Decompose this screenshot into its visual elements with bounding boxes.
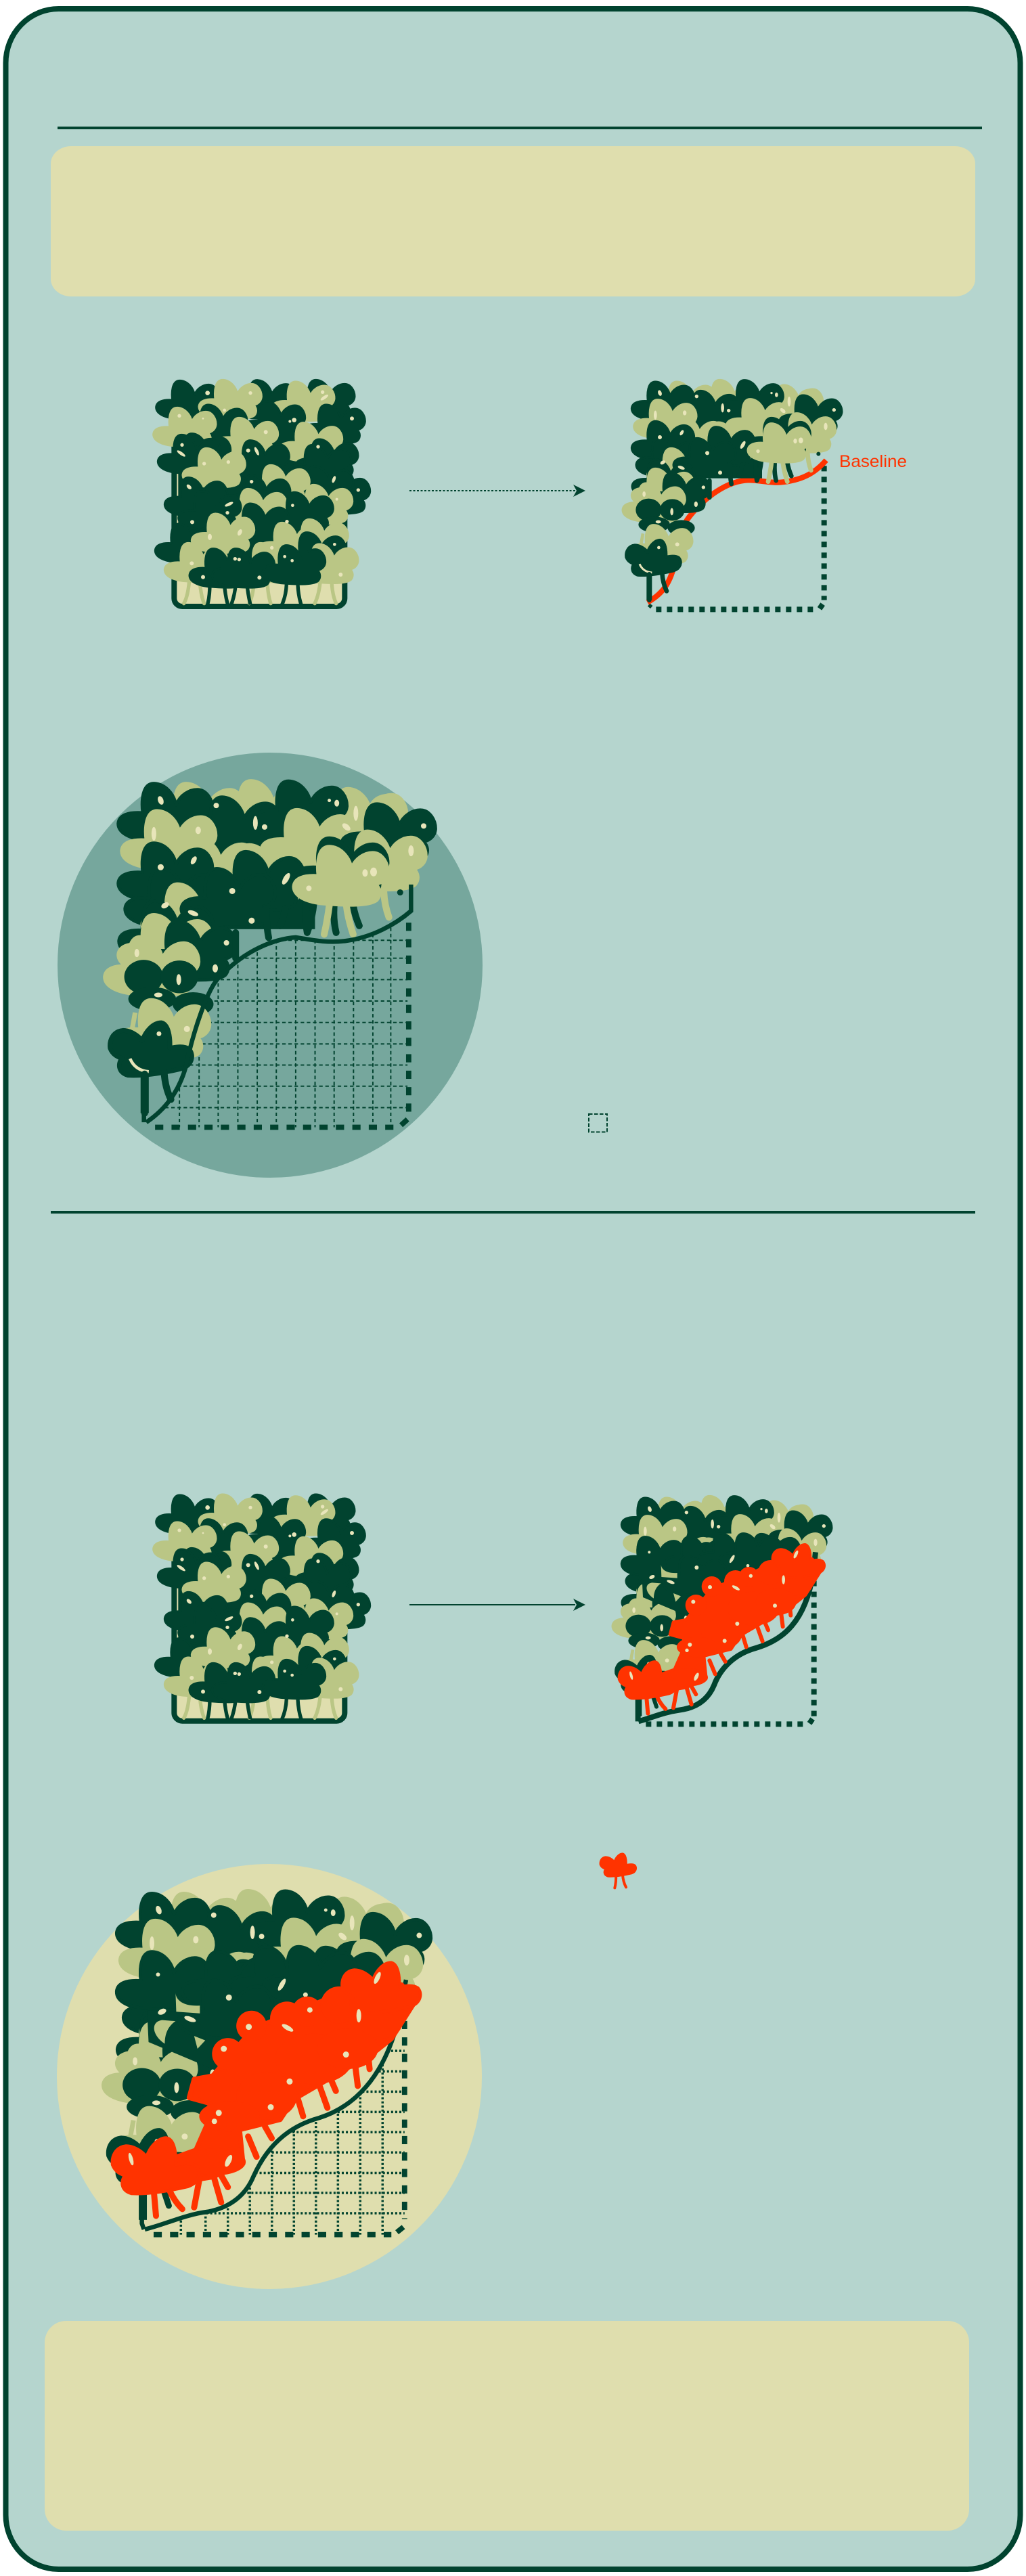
plant bed: full crop before mowing bbox=[154, 380, 370, 606]
cut crop with baseline curve bbox=[623, 380, 842, 610]
magnified circle: baseline grid bbox=[58, 753, 483, 1178]
red pest band enlarged bbox=[112, 1963, 420, 2216]
clover canopy enlarged bbox=[104, 780, 436, 1113]
baseline curve bbox=[648, 460, 826, 602]
clover canopy enlarged bbox=[103, 1890, 431, 2220]
cut line enlarged bbox=[144, 885, 411, 1122]
cut line enlarged bbox=[142, 1980, 406, 2229]
arrow: dotted, mowing step bbox=[409, 485, 585, 497]
conclusion text panel bbox=[45, 2321, 969, 2531]
magnified circle: pest damage grid bbox=[57, 1864, 482, 2289]
clover canopy bbox=[612, 1496, 832, 1716]
quadrat grid and boundary bbox=[155, 923, 411, 1130]
cut curve bbox=[638, 1552, 816, 1721]
quadrat grid and boundary bbox=[153, 2021, 407, 2238]
circle background bbox=[57, 1864, 482, 2289]
circle background bbox=[58, 753, 483, 1178]
dotted crop boundary bbox=[648, 466, 825, 610]
icon: red clover legend bbox=[600, 1853, 636, 1888]
clover canopy bbox=[623, 380, 842, 600]
heading rule: section one bbox=[58, 127, 982, 129]
grazed crop with pest band bbox=[612, 1496, 832, 1725]
arrow: solid, grazing step bbox=[409, 1599, 585, 1611]
plant bed: second full crop bbox=[154, 1494, 370, 1721]
intro text panel bbox=[51, 146, 975, 296]
icon: dashed quadrat legend bbox=[589, 1114, 607, 1132]
dotted crop boundary bbox=[646, 1581, 815, 1725]
baseline label: Baseline bbox=[839, 452, 907, 471]
red pest band bbox=[619, 1544, 825, 1714]
heading rule: section two bbox=[51, 1211, 975, 1214]
